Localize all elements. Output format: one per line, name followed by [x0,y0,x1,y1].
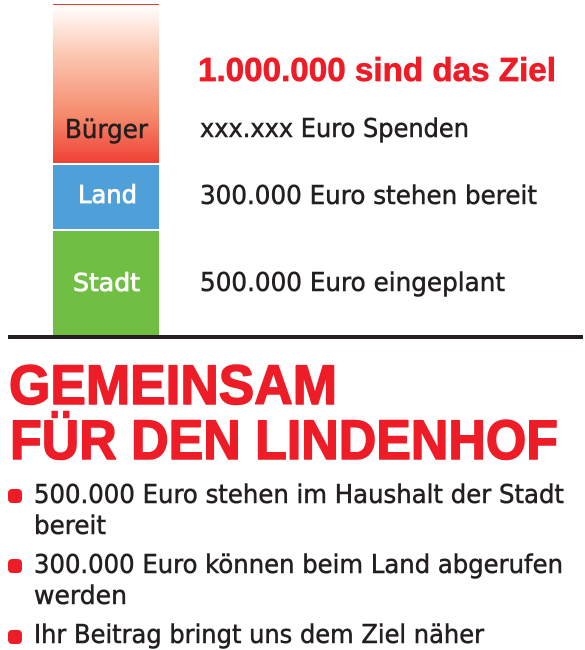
bullet 1: 500.000 Euro stehen im Haushalt der Stadt [34,480,564,510]
bullet list [8,480,564,650]
heading: GEMEINSAM [9,353,337,416]
segment: Stadt: Stadt [73,268,140,297]
label: Stadt funding: 500.000 Euro eingeplant [200,268,505,298]
baseline rule [8,335,583,339]
goal label: 1.000.000 sind das Ziel [198,51,556,88]
bullet 1: bereit [34,511,106,541]
bullet 1 [8,480,564,541]
segment: Land: Land [78,180,137,209]
segment: Bürger: Bürger [65,115,148,145]
heading: FÜR DEN LINDENHOF [10,408,558,471]
segment: Bürger [53,4,159,163]
segment: Land [53,165,159,229]
bullet 3: Ihr Beitrag bringt uns dem Ziel näher [34,620,484,650]
bullet 2: 300.000 Euro können beim Land abgerufen [34,550,563,580]
label: Land funding: 300.000 Euro stehen bereit [200,181,537,211]
bullet 2 [8,550,563,611]
stacked funding column [53,4,159,335]
segment: Stadt [53,231,159,335]
heading [9,353,558,471]
label: Bürger donations: xxx.xxx Euro Spenden [200,114,469,144]
bullet 2: werden [34,581,127,611]
